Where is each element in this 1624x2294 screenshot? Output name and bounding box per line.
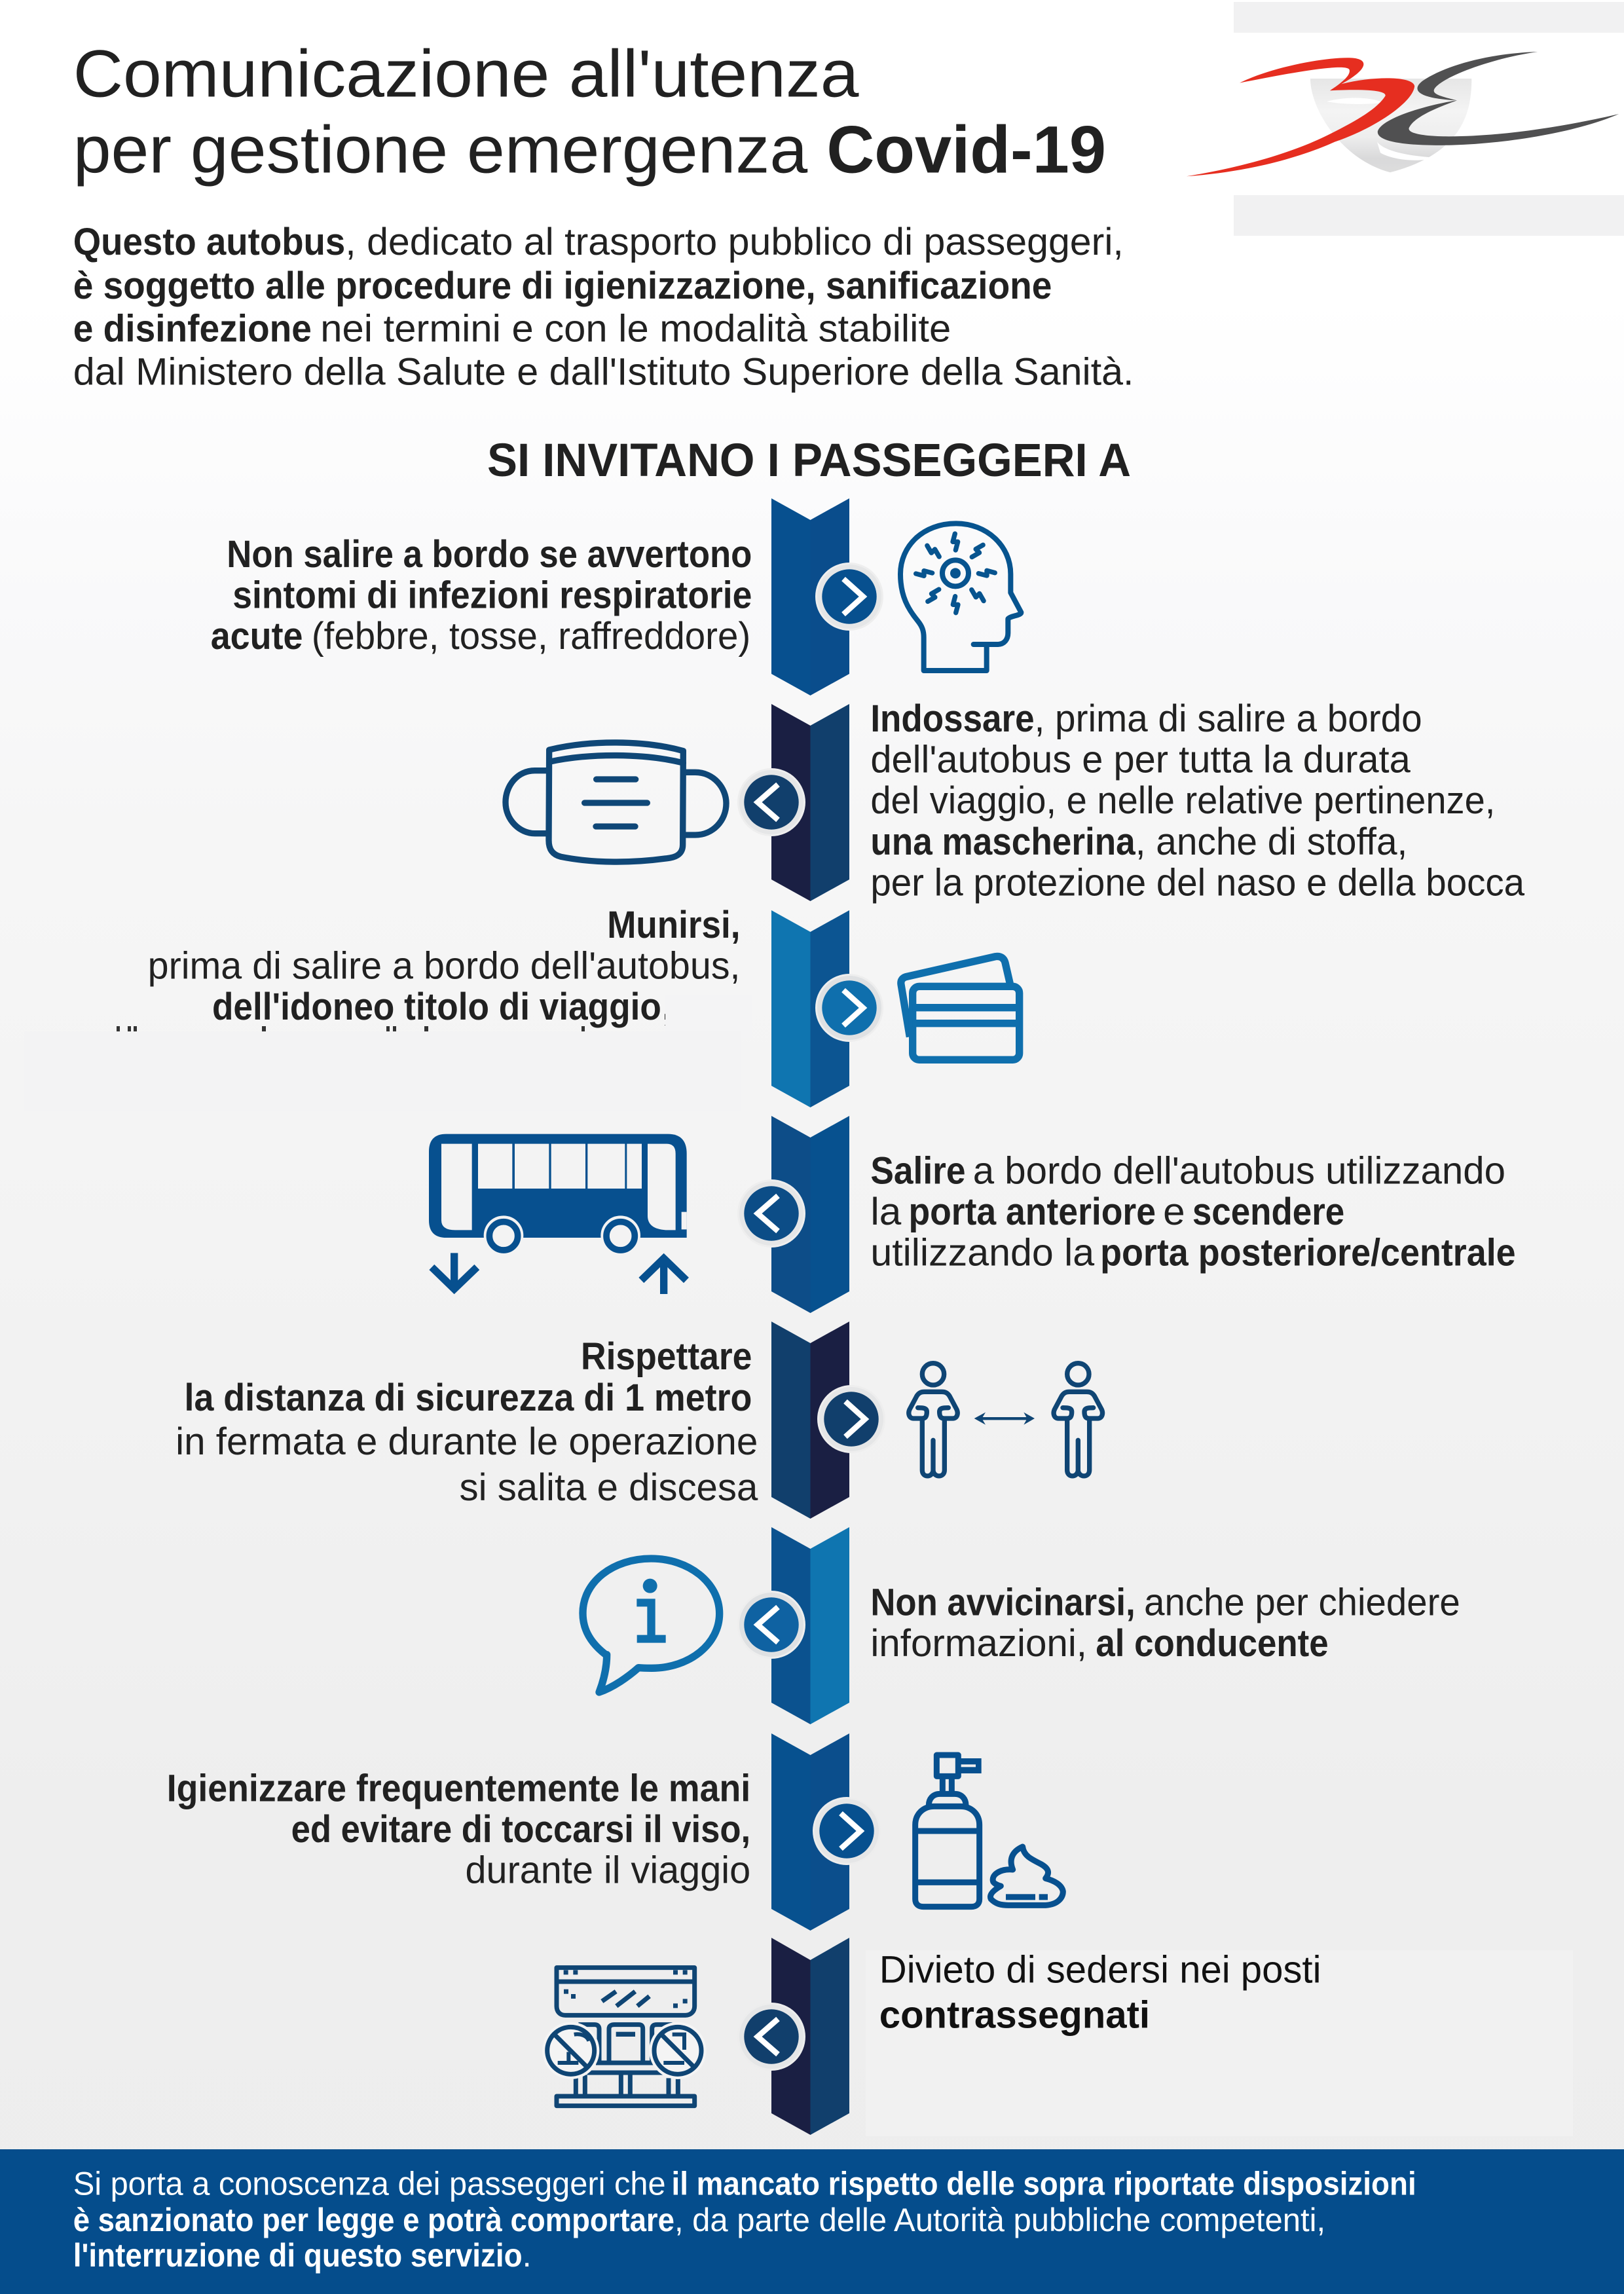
step 3: ticket (24, 904, 1020, 1111)
ribbon (771, 1938, 849, 2135)
text: a bordo dell'autobus utilizzando (973, 1149, 1505, 1192)
icon: sanitizer bottle and foam (915, 1755, 1063, 1907)
footer text (73, 2164, 1416, 2274)
footer text: è sanzionato per legge e potrà comportare (73, 2201, 674, 2238)
step 1: symptoms (211, 498, 1021, 695)
text: porta posteriore/centrale (1100, 1232, 1516, 1274)
text: dell'autobus e per tutta la durata (870, 739, 1411, 781)
text: , prima di salire a bordo (1035, 697, 1422, 740)
text: Igienizzare frequentemente le mani (167, 1767, 750, 1809)
text: Salire (870, 1149, 966, 1192)
text (870, 697, 1525, 904)
text (167, 1767, 750, 1891)
icon: two people with arrow (909, 1363, 1103, 1476)
arrow badge (737, 1179, 805, 1248)
text: durante il viaggio (465, 1849, 750, 1891)
arrow badge (813, 1797, 881, 1865)
text: porta anteriore (908, 1191, 1156, 1233)
text (211, 533, 752, 657)
text: la distanza di sicurezza di 1 metro (185, 1377, 752, 1419)
icon: seats with prohibition signs (542, 1968, 707, 2106)
text: e (1163, 1191, 1185, 1233)
text: Divieto di sedersi nei posti (879, 1948, 1321, 1991)
logo (1187, 52, 1619, 176)
text: la (870, 1191, 902, 1233)
step 8: reserved seats (542, 1938, 1573, 2136)
arrow badge (817, 1385, 885, 1453)
text: Rispettare (581, 1335, 752, 1378)
text: acute (211, 615, 303, 657)
arrow badge (815, 563, 883, 631)
step 4: doors (429, 1116, 1516, 1313)
text: sintomi di infezioni respiratorie (232, 574, 752, 616)
text: prima di salire a bordo dell'autobus, (148, 945, 741, 988)
text: Non avvicinarsi, (870, 1582, 1135, 1624)
header patches behind logo (1234, 2, 1624, 236)
section heading: SI INVITANO I PASSEGGERI A (487, 434, 1131, 487)
step 6: driver (583, 1527, 1460, 1724)
text: utilizzando la (870, 1232, 1095, 1274)
text: anche per chiedere (1144, 1582, 1460, 1624)
text: , (662, 986, 673, 1028)
arrow badge (737, 1591, 805, 1659)
text: si salita e discesa (460, 1466, 758, 1509)
text: una mascherina (870, 821, 1135, 863)
footer text: il mancato rispetto delle sopra riportate disposizioni (671, 2164, 1416, 2202)
step 5: distance (175, 1322, 1103, 1519)
ribbon (771, 910, 849, 1107)
intro paragraph: e disinfezione (73, 308, 312, 350)
text: Non salire a bordo se avvertono (227, 533, 752, 576)
footer text: , da parte delle Autorità pubbliche competenti, (674, 2201, 1325, 2238)
footer text: Si porta a conoscenza dei passeggeri che (73, 2164, 666, 2202)
text: del viaggio, e nelle relative pertinenze, (870, 779, 1495, 822)
intro paragraph: dal Ministero della Salute e dall'Istituto Superiore della Sanità. (73, 351, 1134, 394)
text patch (866, 1950, 1573, 2136)
text: contrassegnati (879, 1994, 1150, 2037)
icon: surgical mask (506, 743, 726, 862)
ribbon (771, 1116, 849, 1313)
arrow badge (815, 974, 883, 1042)
title: Comunicazione all'utenza (73, 36, 859, 111)
text (870, 1582, 1460, 1665)
text: dell'idoneo titolo di viaggio (212, 986, 661, 1028)
text: (febbre, tosse, raffreddore) (312, 615, 750, 657)
icon: bus with arrows (429, 1134, 687, 1294)
text: in fermata e durante le operazione (175, 1420, 758, 1463)
text: ed evitare di toccarsi il viso, (291, 1808, 750, 1851)
intro paragraph: è soggetto alle procedure di igienizzazione, sanificazione (73, 265, 1052, 307)
arrow badge (737, 768, 805, 836)
footer text: l'interruzione di questo servizio (73, 2236, 523, 2274)
text: Munirsi, (607, 904, 741, 946)
arrow badge (737, 2003, 805, 2071)
title: Covid-19 (826, 113, 1106, 187)
text: Indossare (870, 697, 1035, 740)
text: al conducente (1096, 1622, 1329, 1665)
icon: head with lightning (900, 523, 1021, 671)
intro paragraph: nei termini e con le modalità stabilite (320, 308, 951, 350)
ribbon (771, 704, 849, 901)
text: , anche di stoffa, (1135, 821, 1407, 863)
icon: info speech bubble (583, 1559, 720, 1692)
cover patches over cut-off text (24, 995, 752, 1111)
icon: cards (901, 956, 1020, 1060)
text: per la protezione del naso e della bocca (870, 861, 1525, 904)
title: per gestione emergenza (73, 113, 808, 187)
text (148, 904, 741, 1028)
text (175, 1335, 758, 1509)
step 7: hygiene (167, 1733, 1063, 1931)
intro paragraph (73, 221, 1134, 394)
footer text: . (523, 2236, 532, 2274)
ribbon (771, 498, 849, 695)
ribbon (771, 1733, 849, 1931)
ribbon (771, 1322, 849, 1519)
text (870, 1149, 1516, 1274)
ribbon (771, 1527, 849, 1724)
footer banner (0, 2149, 1624, 2294)
text: informazioni, (870, 1622, 1087, 1665)
text (879, 1948, 1321, 2037)
title (73, 36, 1106, 187)
text: scendere (1192, 1191, 1344, 1233)
step 2: mask (506, 697, 1525, 904)
intro paragraph: , dedicato al trasporto pubblico di passeggeri, (345, 221, 1124, 263)
intro paragraph: Questo autobus (73, 221, 345, 263)
